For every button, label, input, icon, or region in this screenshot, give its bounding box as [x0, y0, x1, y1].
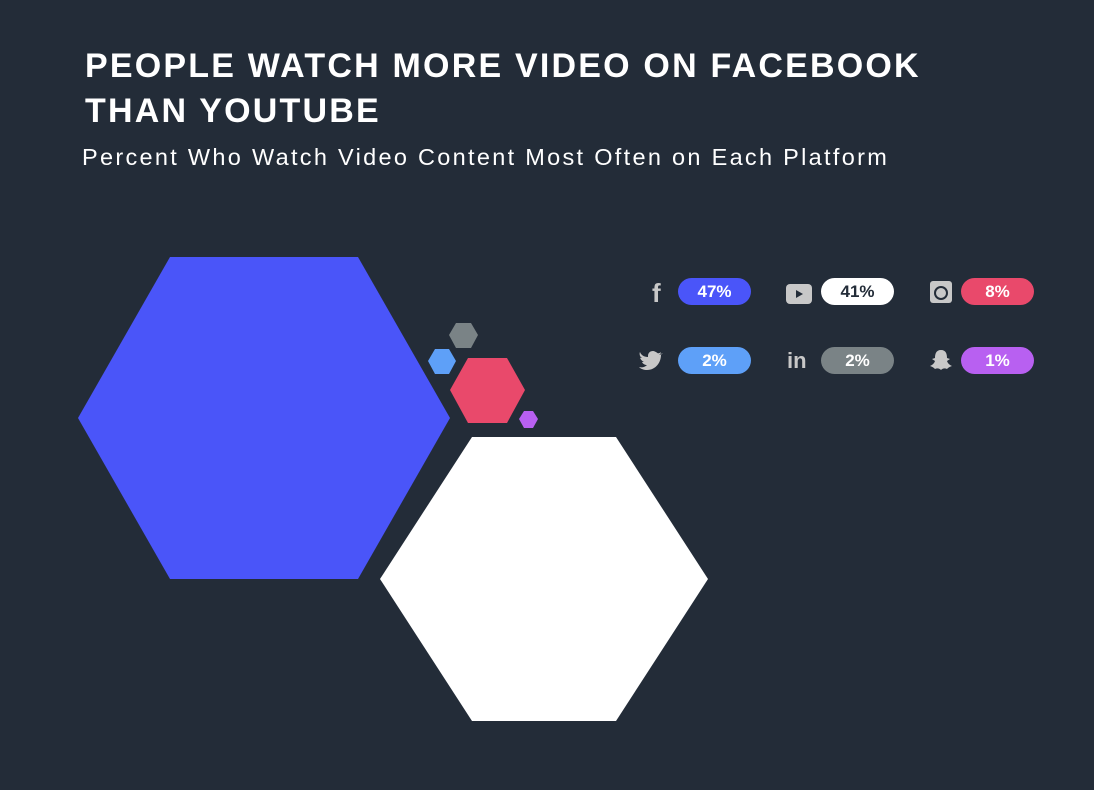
title: PEOPLE WATCH MORE VIDEO ON FACEBOOK	[85, 47, 921, 85]
hex: youtube	[380, 437, 708, 721]
pill: 2% linkedin	[821, 347, 894, 374]
pill: 8%	[961, 278, 1034, 305]
pill: 2% twitter: 2%	[702, 351, 727, 370]
pill: 47%: 47%	[697, 282, 732, 301]
pill: 2% twitter	[678, 347, 751, 374]
hex: snapchat	[519, 411, 538, 428]
icon: instagram	[930, 281, 952, 303]
pill: 1%	[961, 347, 1034, 374]
icon: snapchat	[930, 350, 952, 370]
subtitle: Percent Who Watch Video Content Most Often on Each Platform	[82, 144, 889, 170]
pill: 1%: 1%	[985, 351, 1010, 370]
pill: 47%	[678, 278, 751, 305]
title: THAN YOUTUBE	[85, 92, 381, 130]
icon: youtube	[786, 284, 812, 304]
pill: 41%	[821, 278, 894, 305]
pill: 41%: 41%	[840, 282, 875, 301]
icon: linkedin: in	[787, 348, 807, 373]
icon: facebook: f	[652, 278, 661, 308]
hex: facebook	[78, 257, 450, 579]
icon: twitter	[639, 351, 663, 370]
legend	[639, 278, 1034, 374]
title	[85, 47, 921, 130]
pill: 8%: 8%	[985, 282, 1010, 301]
hex: linkedin	[449, 323, 478, 348]
hex: twitter	[428, 349, 456, 374]
hex: instagram	[450, 358, 525, 423]
pill: 2% linkedin: 2%	[845, 351, 870, 370]
